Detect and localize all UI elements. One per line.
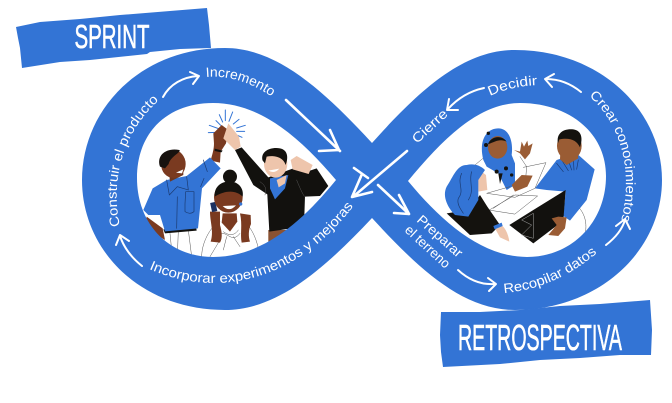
arrow: to Incremento — [163, 72, 199, 97]
arrow: Crear conocimientos to Decidir — [545, 74, 581, 92]
label: Preparar el terreno: el terreno — [406, 227, 448, 268]
icon: high five sparkle — [208, 110, 245, 137]
label: Crear conocimientos: Crear conocimientos — [591, 92, 636, 222]
label: Incremento: Incremento — [206, 68, 274, 96]
arrow: crossing to Preparar — [354, 168, 409, 214]
label: Construir el producto: Construir el producto — [108, 96, 158, 226]
banner: SPRINT — [16, 8, 211, 68]
label: Decidir: Decidir — [488, 76, 537, 96]
arrow: Cierre to crossing — [352, 151, 407, 197]
figure: man in blue shirt — [143, 125, 228, 260]
arrow: to crossing — [286, 100, 340, 151]
label: Incorporar experimentos y mejoras: Incorporar experimentos y mejoras — [150, 203, 352, 284]
arrow: to Crear conocimientos — [606, 219, 630, 245]
label: Preparar el terreno: Preparar — [416, 214, 462, 256]
left photo: team celebrating — [120, 100, 340, 260]
banner: RETROSPECTIVA — [440, 300, 652, 367]
figure: man in black sweater — [223, 123, 328, 242]
figure: man in blue sweater — [535, 129, 595, 235]
icon: papers on table — [487, 163, 546, 214]
infinity loop — [82, 48, 662, 310]
figure: woman in hijab — [475, 128, 533, 192]
arrow: Preparar to Recopilar — [458, 270, 496, 291]
icon: laptop — [509, 190, 567, 243]
figure: woman with blue hair — [445, 164, 509, 242]
arrow: to Construir el producto — [116, 235, 142, 266]
figure: woman with phone — [202, 170, 258, 260]
label: Cierre: Cierre — [413, 111, 447, 142]
label: Preparar el terreno — [406, 214, 462, 268]
arrow: Decidir to Cierre — [447, 88, 484, 110]
label: Recopilar datos: Recopilar datos — [504, 248, 596, 293]
right photo: retrospective meeting — [445, 128, 595, 243]
banner: SPRINT: SPRINT — [74, 18, 150, 55]
